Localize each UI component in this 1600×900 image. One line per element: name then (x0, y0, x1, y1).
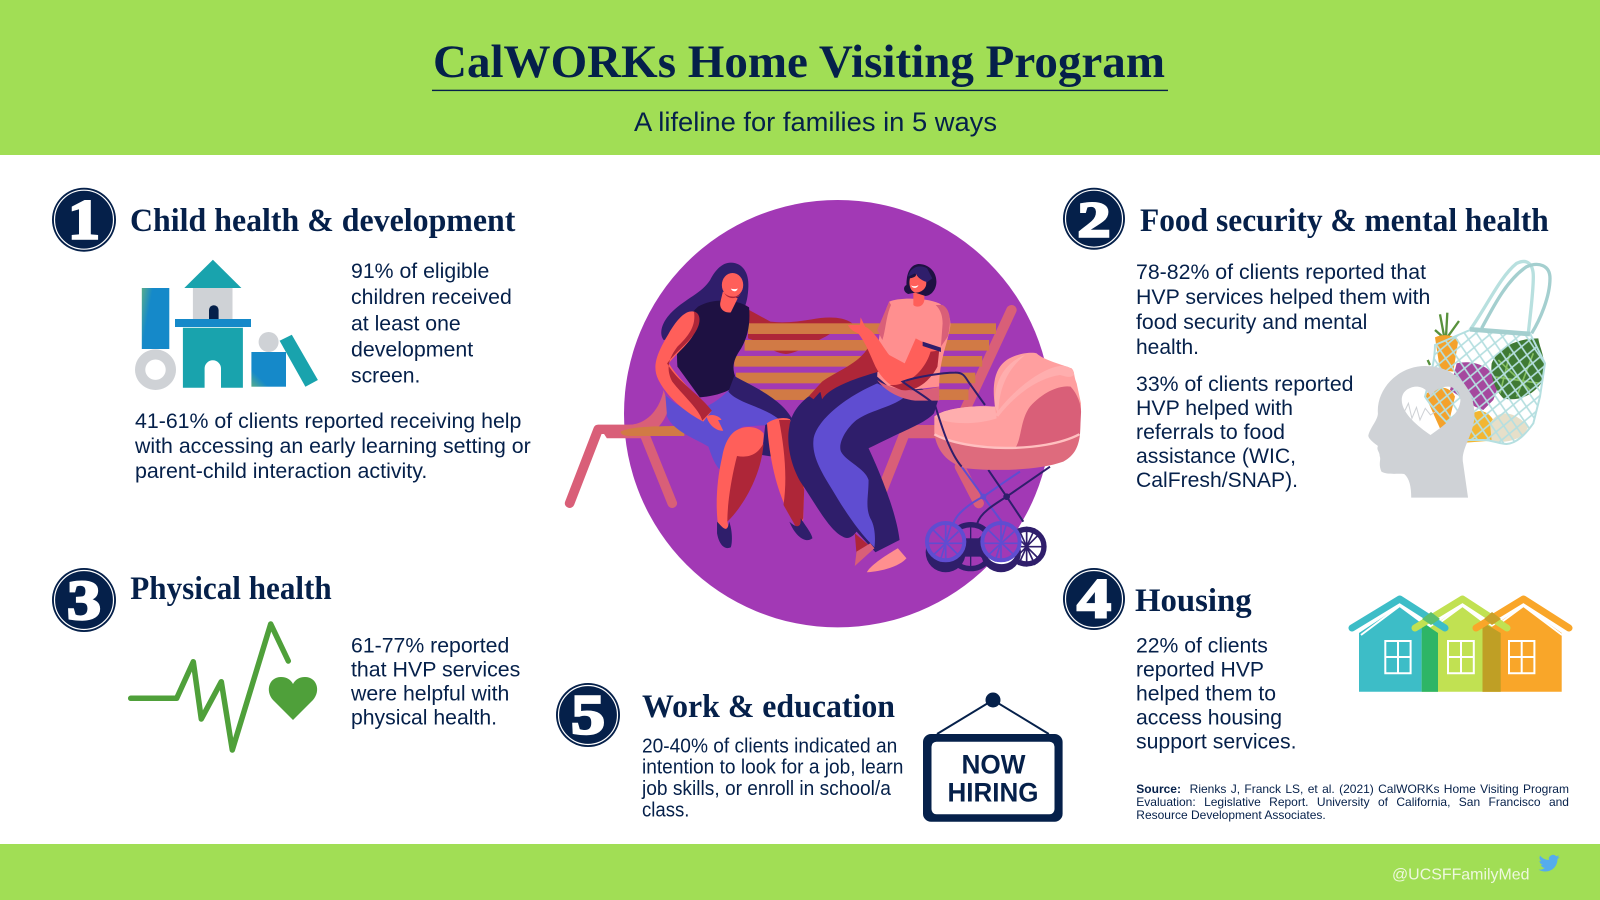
stroller frame (953, 467, 1050, 523)
text: physical health: were helpful with (350, 681, 509, 705)
number badge 4: 4 (1077, 568, 1111, 630)
text: housing: support services. (1136, 730, 1296, 754)
text: work and education: job skills, or enroll in school/a (641, 778, 892, 800)
text: development screen: at least one (351, 311, 461, 335)
stroller wheels (926, 523, 1046, 572)
text: housing: helped them to (1136, 681, 1276, 705)
text: food referrals: referrals to food (1136, 420, 1285, 444)
text: physical health (350, 634, 520, 729)
text: physical health: 61-77% reported (351, 634, 509, 658)
text: food security: food security and mental (1136, 310, 1367, 334)
text: housing (1136, 633, 1296, 754)
woman on the left (655, 263, 812, 548)
text: food referrals: CalFresh/SNAP). (1136, 468, 1298, 492)
text: development screen: screen. (351, 363, 420, 387)
icon: heartbeat and heart (131, 624, 317, 750)
section 5: work and education (556, 683, 1063, 822)
heading 2: Food security & mental health (1140, 203, 1549, 239)
purple circle (624, 200, 1051, 627)
text: food referrals: 33% of clients reported (1136, 372, 1354, 396)
text: work and education: class. (642, 799, 689, 821)
heading 1: Child health & development (130, 203, 515, 239)
stroller handle (903, 373, 985, 467)
text: development screen: 91% of eligible (351, 259, 489, 283)
text: early learning: parent-child interaction activity. (135, 459, 427, 483)
heading 4: Housing (1135, 583, 1252, 619)
icon: now hiring sign (923, 692, 1063, 822)
text: early learning: 41-61% of clients reported receiving help (135, 409, 521, 433)
icon: toy blocks (135, 260, 318, 390)
number badge 5 (556, 683, 620, 747)
section 2: food security and mental health (1063, 188, 1550, 498)
source citation: Source: Rienks J, Franck LS, et al. (2021) CalWORKs Home Visiting Program Evaluation: Legislative Report. University of California, San Francisco and Resource Development Associates. (1136, 782, 1569, 822)
text: housing: 22% of clients (1136, 633, 1268, 657)
text: early learning: with accessing an early learning setting or (134, 434, 531, 458)
text: work and education: intention to look for a job, learn (642, 757, 903, 779)
heading 3: Physical health (130, 571, 332, 607)
number badge 1 (52, 188, 116, 252)
icon: now hiring sign: HIRING (948, 778, 1038, 808)
number badge 5: 5 (571, 684, 605, 746)
header band (0, 0, 1600, 155)
text: physical health: that HVP services (351, 657, 520, 681)
icon: three houses (1352, 599, 1569, 692)
text: food security (1136, 260, 1430, 359)
pram body (934, 353, 1081, 470)
text: development screen (351, 259, 512, 387)
figures and bench (570, 263, 1011, 572)
number badge 2 (1063, 188, 1125, 250)
woman on the right (788, 264, 950, 572)
number badge 3: 3 (67, 570, 101, 632)
icon: twitter bird (1539, 855, 1560, 871)
number badge 1: 1 (68, 190, 100, 252)
text: physical health: physical health. (351, 705, 497, 729)
text: food referrals: HVP helped with (1136, 396, 1293, 420)
text: work and education (641, 735, 903, 821)
section 4: housing (1063, 568, 1569, 754)
number badge 2: 2 (1078, 191, 1110, 247)
section 3: physical health (52, 568, 520, 750)
head silhouette with heart (1368, 366, 1474, 498)
text: development screen: children received (351, 285, 512, 309)
illustration: two women on a bench with a stroller (570, 200, 1081, 627)
text: housing: access housing (1136, 706, 1282, 730)
grocery bag (1425, 261, 1550, 444)
heading 5: Work & education (642, 689, 895, 725)
section 1: child health and development (52, 188, 531, 483)
text: housing: reported HVP (1136, 657, 1264, 681)
number badge 4 (1063, 568, 1125, 630)
text: food security: 78-82% of clients reported that (1136, 260, 1426, 284)
subtitle: A lifeline for families in 5 ways (634, 107, 997, 137)
icon: grocery bag and head with heart (1368, 261, 1550, 498)
text: food security: health. (1136, 335, 1199, 359)
stroller (903, 353, 1081, 572)
text: food referrals: assistance (WIC, (1136, 444, 1296, 468)
number badge 3 (52, 568, 116, 632)
text: work and education: 20-40% of clients indicated an (642, 735, 897, 757)
text: development screen: development (351, 337, 473, 361)
bench (570, 309, 1011, 503)
text: food security: HVP services helped them with (1136, 285, 1430, 309)
icon: now hiring sign: NOW (962, 749, 1026, 779)
twitter handle: @UCSFFamilyMed (1392, 866, 1530, 883)
footer band (0, 844, 1600, 900)
title: CalWORKs Home Visiting Program (433, 36, 1165, 88)
text: food referrals (1136, 372, 1354, 492)
text: early learning (134, 409, 531, 483)
